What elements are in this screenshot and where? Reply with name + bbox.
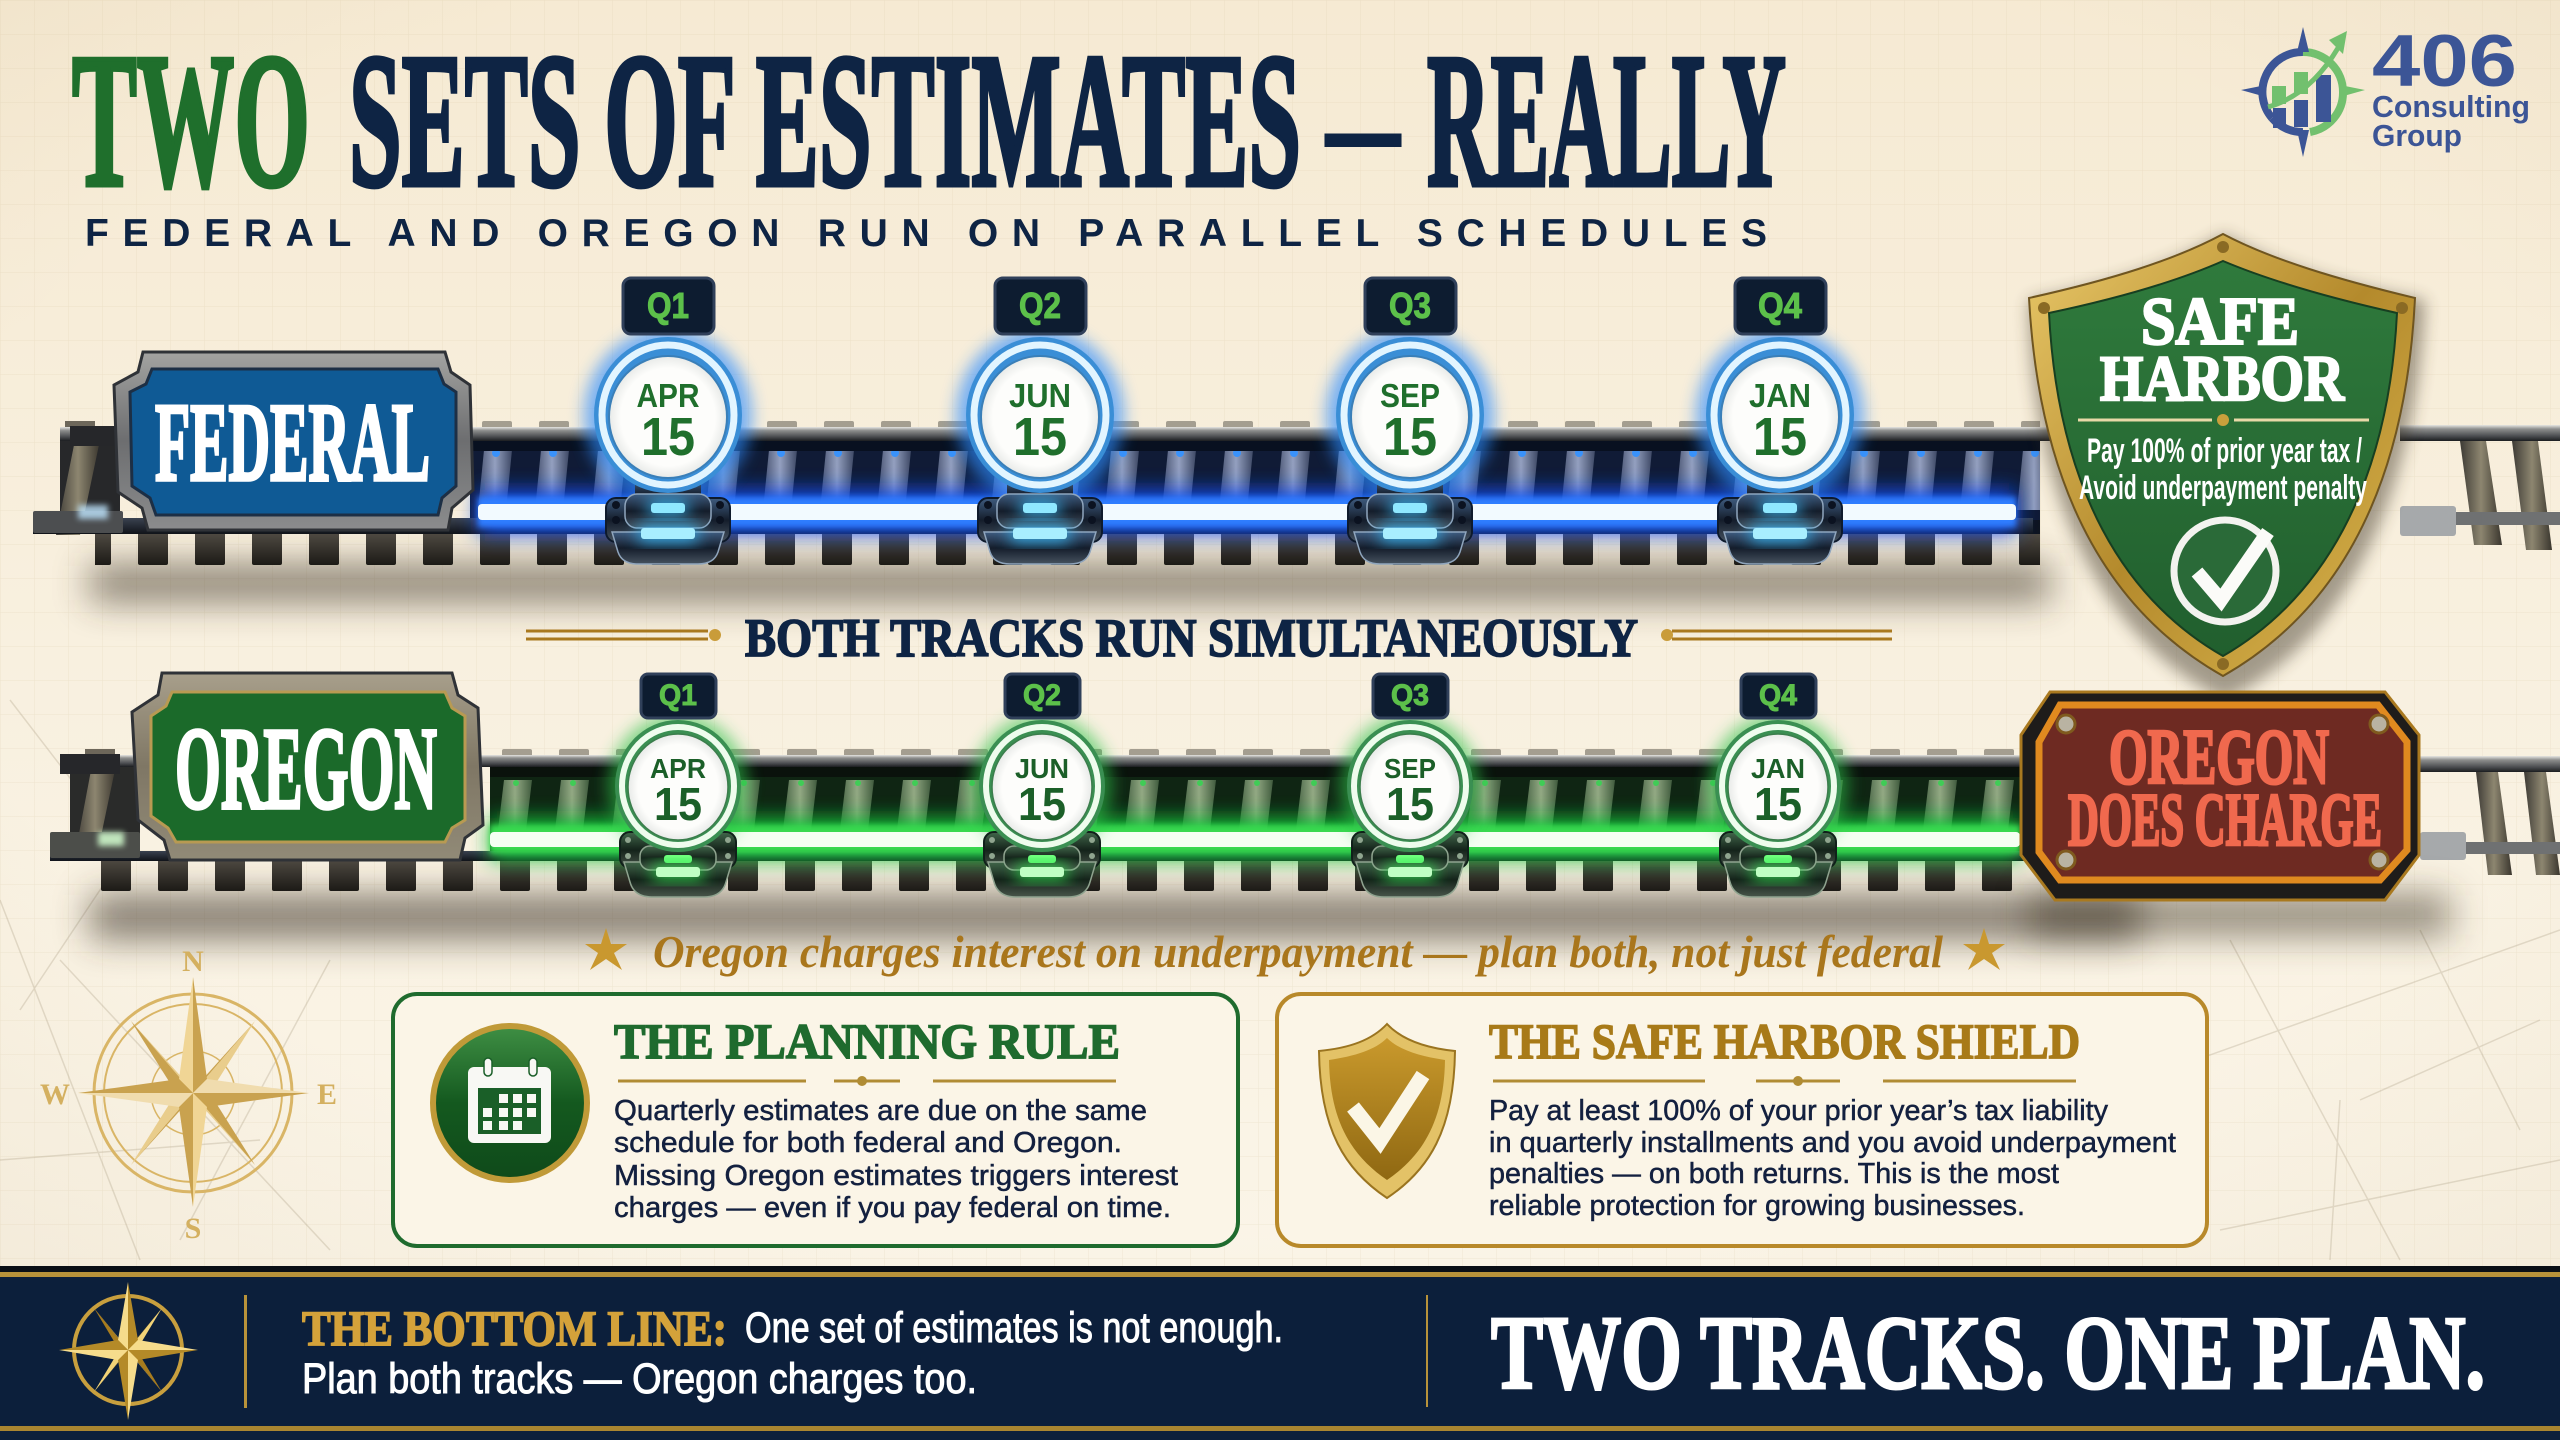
title	[72, 14, 1786, 227]
oregon node Q1	[608, 674, 748, 897]
oregon node Q2: JUN	[1015, 753, 1069, 784]
logo: 406 Consulting Group: Consulting	[2372, 89, 2530, 124]
oregon node Q4: Q4	[1759, 679, 1797, 712]
safe harbor shield: Avoid underpayment penalty	[2079, 469, 2367, 507]
federal node Q2	[956, 278, 1124, 564]
panel: the planning rule: THE PLANNING RULE	[614, 1013, 1120, 1069]
panel: the safe harbor shield: Pay at least 100% of your prior year’s tax liability	[1489, 1095, 2108, 1127]
federal node Q3: 15	[1383, 407, 1437, 467]
oregon node Q4: JAN	[1751, 753, 1805, 784]
federal node Q2: Q2	[1019, 285, 1061, 326]
federal node Q4: Q4	[1758, 285, 1802, 326]
bottom line text: Plan both tracks — Oregon charges too.	[302, 1355, 977, 1403]
federal node Q4: JAN	[1749, 377, 1811, 414]
compass rose: W	[40, 1078, 70, 1111]
federal node Q2: JUN	[1009, 377, 1071, 414]
safe harbor shield	[2029, 234, 2425, 700]
icon: gold shield	[1319, 1024, 1455, 1198]
federal track	[33, 421, 2560, 601]
compass rose: N	[182, 945, 204, 978]
safe harbor shield: SAFE	[2141, 283, 2299, 359]
federal node Q3: SEP	[1380, 377, 1440, 414]
federal node Q3	[1326, 278, 1494, 564]
compass rose	[40, 945, 337, 1245]
bottom line text: One set of estimates is not enough.	[745, 1304, 1283, 1352]
both tracks caption: BOTH TRACKS RUN SIMULTANEOUSLY	[745, 608, 1638, 668]
text: REALLY	[1427, 14, 1786, 227]
panel: the planning rule	[393, 994, 1238, 1246]
oregon node Q1: 15	[654, 778, 702, 830]
bottom line text	[302, 1300, 1283, 1403]
oregon node Q3: SEP	[1384, 753, 1436, 784]
oregon does charge sign: OREGON	[2109, 713, 2329, 800]
title: TWO	[72, 14, 310, 227]
subtitle: FEDERAL AND OREGON RUN ON PARALLEL SCHEDULES	[85, 212, 1767, 255]
federal node Q1	[584, 278, 752, 564]
panel: the safe harbor shield: reliable protection for growing businesses.	[1489, 1190, 2025, 1222]
callout: oregon charges interest: Oregon charges interest on underpayment — plan both, not just federal	[653, 926, 1943, 977]
oregon node Q3: Q3	[1391, 679, 1429, 712]
oregon node Q2: 15	[1018, 778, 1066, 830]
oregon node Q4: 15	[1754, 778, 1802, 830]
oregon node Q3: 15	[1386, 778, 1434, 830]
title: —	[1324, 14, 1402, 227]
panel: the safe harbor shield: penalties — on both returns. This is the most	[1489, 1158, 2059, 1190]
panel: the safe harbor shield: THE SAFE HARBOR SHIELD	[1489, 1013, 2080, 1069]
oregon node Q2	[972, 674, 1112, 897]
federal sign	[114, 352, 473, 530]
oregon sign	[132, 673, 483, 860]
federal node Q1: 15	[641, 407, 695, 467]
oregon sign: OREGON	[175, 703, 437, 834]
logo: 406 Consulting Group: 406	[2372, 21, 2517, 102]
federal node Q2: 15	[1013, 407, 1067, 467]
panel: the planning rule: schedule for both federal and Oregon.	[614, 1127, 1122, 1159]
federal node Q4: 15	[1753, 407, 1807, 467]
oregon does charge sign	[2021, 692, 2450, 935]
title: SETS OF ESTIMATES	[349, 14, 1301, 227]
footer band	[0, 1266, 2560, 1440]
oregon node Q1: APR	[650, 753, 706, 784]
panel: the planning rule: Missing Oregon estimates triggers interest	[614, 1160, 1178, 1192]
oregon node Q4	[1708, 674, 1848, 897]
panel: the planning rule: charges — even if you pay federal on time.	[614, 1192, 1171, 1224]
oregon node Q3	[1340, 674, 1480, 897]
safe harbor shield: Pay 100% of prior year tax /	[2087, 432, 2362, 470]
oregon track	[50, 749, 2560, 939]
panel: the planning rule: Quarterly estimates are due on the same	[614, 1095, 1147, 1127]
logo: 406 Consulting Group: Group	[2372, 118, 2462, 153]
compass rose: E	[317, 1078, 337, 1111]
federal node Q1: APR	[636, 377, 700, 414]
icon: gold compass	[59, 1282, 198, 1420]
panel: the safe harbor shield: in quarterly installments and you avoid underpayment	[1489, 1127, 2176, 1159]
safe harbor shield: HARBOR	[2100, 343, 2345, 415]
oregon node Q2: Q2	[1023, 679, 1061, 712]
panel: the safe harbor shield	[1277, 994, 2207, 1246]
federal node Q3: Q3	[1389, 285, 1431, 326]
compass rose: S	[185, 1212, 201, 1245]
logo: 406 Consulting Group	[2241, 21, 2530, 157]
federal node Q1: Q1	[647, 285, 689, 326]
federal sign: FEDERAL	[155, 381, 430, 505]
federal node Q4	[1696, 278, 1864, 564]
icon: calendar	[433, 1026, 587, 1180]
oregon node Q1: Q1	[659, 679, 697, 712]
bottom line text: THE BOTTOM LINE:	[302, 1300, 727, 1356]
